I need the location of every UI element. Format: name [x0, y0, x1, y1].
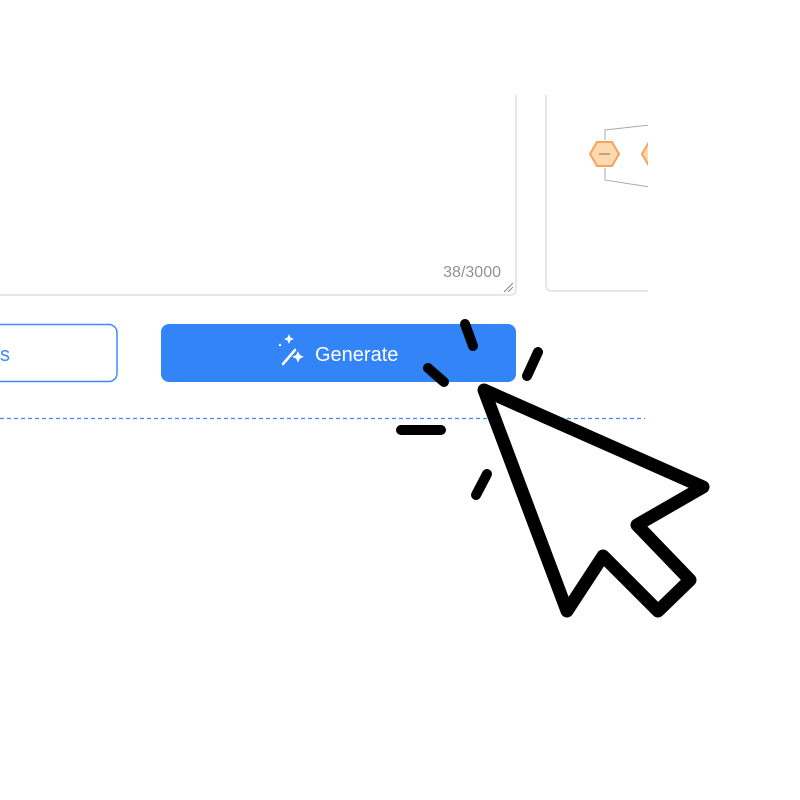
outline button: s: [0, 344, 10, 366]
cursor arrow: [484, 390, 703, 611]
hexagon node: [590, 142, 619, 166]
icon: magic wand: [279, 334, 304, 364]
generate button: [161, 324, 516, 382]
textarea panel: [0, 95, 516, 295]
preview panel: [546, 90, 800, 310]
resize handle: [504, 283, 513, 292]
character counter: 38/3000: [443, 264, 501, 281]
diagram connectors: [605, 125, 650, 187]
generate button: Generate: [315, 344, 398, 366]
dashed divider: [0, 418, 645, 420]
outline button: [0, 324, 117, 382]
click burst lines: [401, 324, 538, 495]
hexagon node partial: [642, 142, 671, 166]
